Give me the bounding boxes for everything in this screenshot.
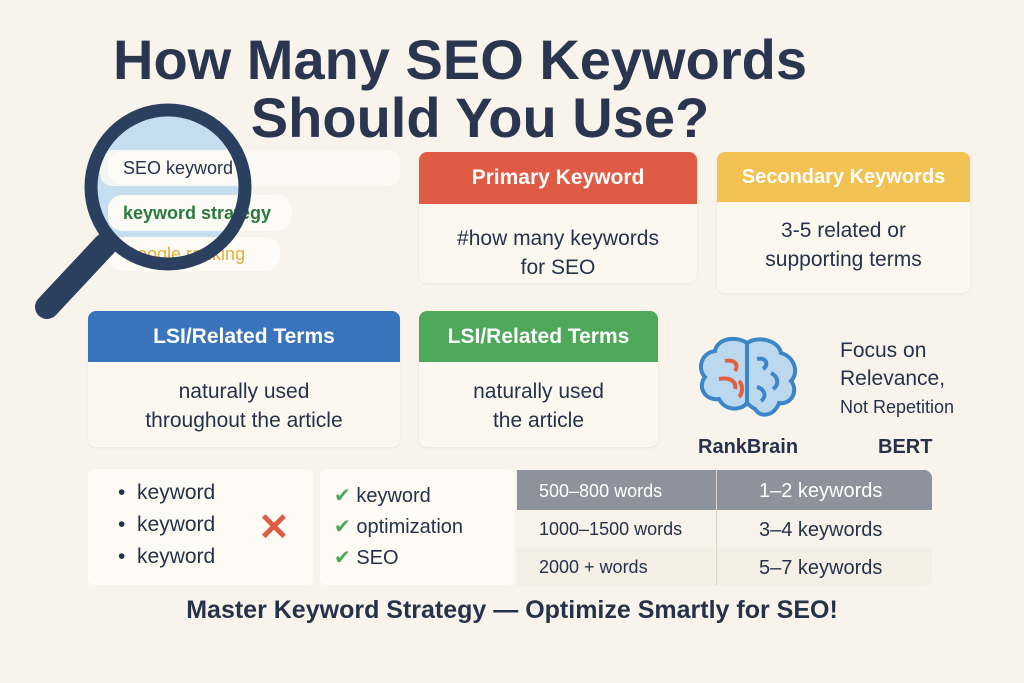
card: primary keyword: for SEO [521,256,595,279]
icon: magnifying glass [35,104,252,319]
table: word count vs keywords: 1–2 keywords [759,480,882,502]
label: BERT: BERT [878,436,932,458]
card: LSI green: naturally used [473,380,604,403]
panel: good keywords: ✔ keyword [334,485,431,507]
suggestion: keyword strategy: keyword strategy [123,203,271,223]
suggestion: Google ranking [108,237,280,271]
bullet list: • keyword [118,513,215,536]
lens fill [98,116,238,238]
text: focus on relevance [840,339,954,417]
label: RankBrain: RankBrain [698,436,798,458]
table: word count vs keywords: 500–800 words [539,481,662,501]
table: word count vs keywords: 1000–1500 words [539,519,682,539]
card: LSI blue [88,311,400,447]
table: word count vs keywords: 5–7 keywords [759,557,882,579]
card: LSI blue: naturally used [179,380,309,403]
suggestion: SEO keyword [108,151,258,185]
icon: brain [698,336,798,417]
panel: good keywords: ✔ optimization [334,516,463,538]
panel: good keywords [320,469,515,585]
text: focus on relevance: Focus on [840,339,926,362]
card: secondary keywords: 3-5 related or [781,219,906,242]
card: LSI blue: throughout the article [145,409,343,432]
card: primary keyword: #how many keywords [457,227,659,250]
suggestion: SEO keyword: SEO keyword [123,158,233,178]
card: LSI blue: LSI/Related Terms [153,324,335,348]
card: secondary keywords [717,152,970,293]
search suggestions panel [100,150,399,271]
card: LSI green: LSI/Related Terms [448,324,629,348]
title [113,28,807,149]
table: word count vs keywords: 2000 + words [539,557,648,577]
text: focus on relevance: Relevance, [840,367,945,390]
card: LSI green: the article [493,409,584,432]
bullet list [118,481,215,568]
bullet list: • keyword [118,545,215,568]
bullet list: • keyword [118,481,215,504]
title: How Many SEO Keywords [113,28,807,91]
table: word count vs keywords [517,470,932,586]
suggestion: Google ranking: Google ranking [123,244,245,264]
text: focus on relevance: Not Repetition [840,397,954,417]
card: primary keyword [419,152,697,283]
panel: keyword stuffing [88,469,313,585]
card: primary keyword: Primary Keyword [472,166,644,189]
suggestion: keyword strategy [108,195,292,231]
panel: good keywords: ✔ SEO [334,547,399,569]
icon: red cross: ✕ [258,507,290,549]
table: word count vs keywords: 3–4 keywords [759,519,882,541]
title: Should You Use? [251,86,709,149]
card: LSI green [419,311,658,447]
card: secondary keywords: Secondary Keywords [742,166,945,188]
footer tagline: Master Keyword Strategy — Optimize Smartly for SEO! [186,596,838,624]
card: secondary keywords: supporting terms [765,248,922,271]
